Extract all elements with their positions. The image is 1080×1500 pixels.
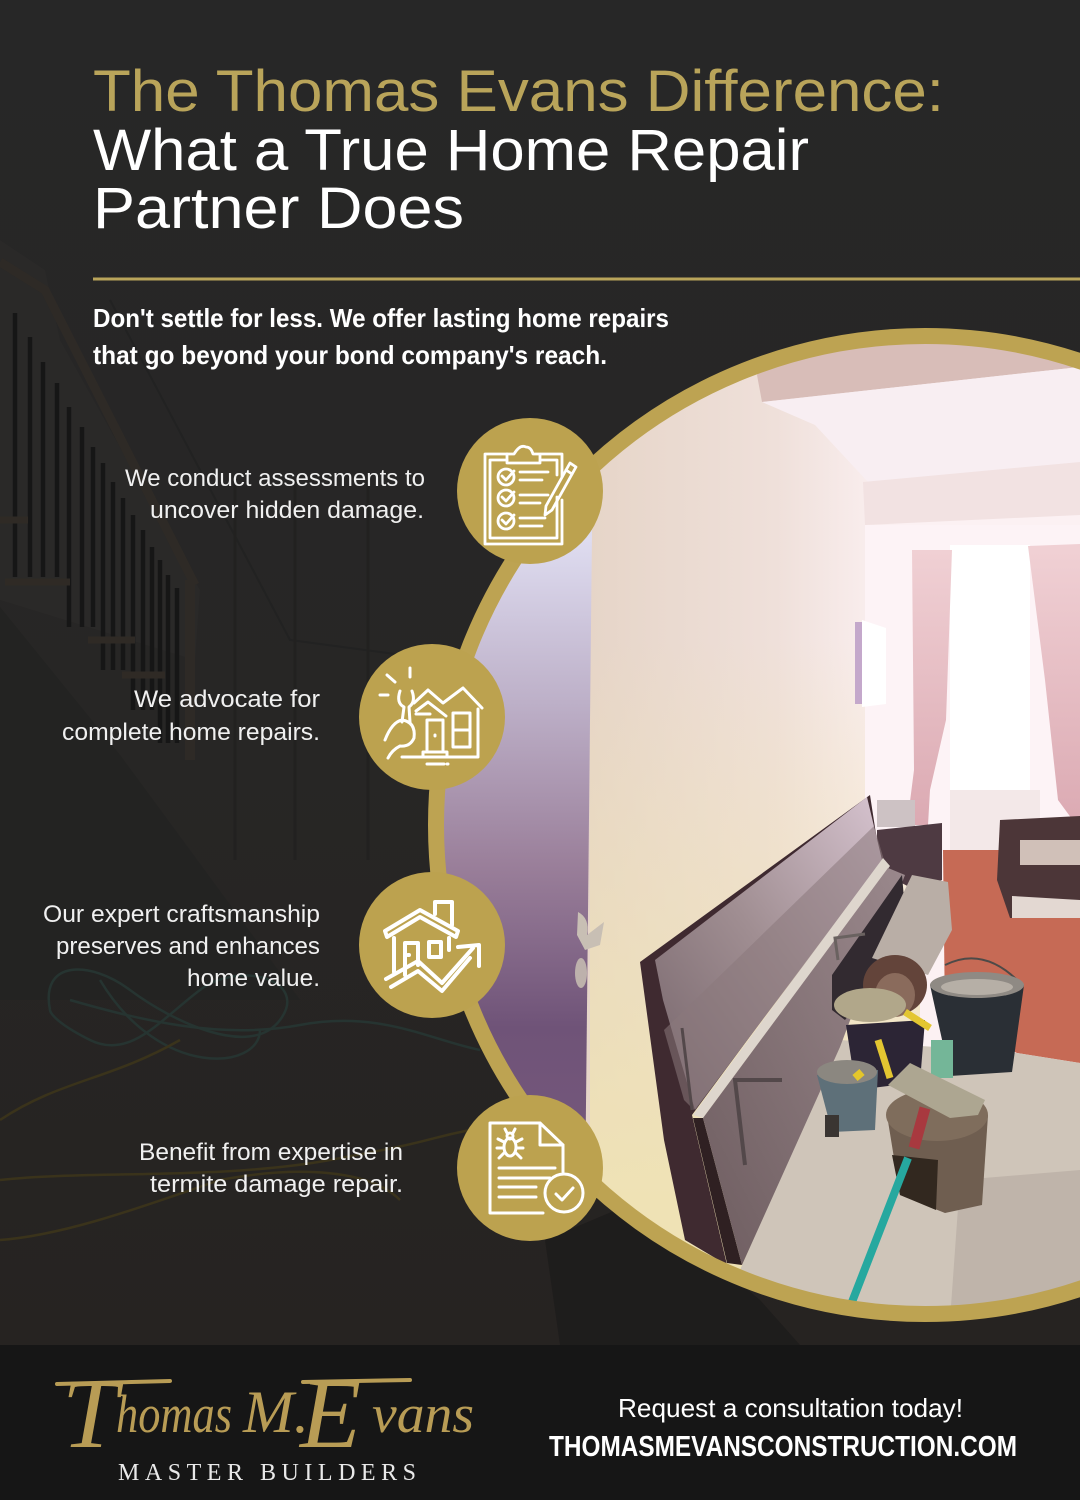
title: Partner Does	[93, 176, 464, 241]
far room wall and window	[865, 525, 920, 838]
furniture	[877, 800, 915, 827]
carpet and floor	[943, 850, 1080, 1063]
gold circular ring around photo	[436, 336, 1080, 1314]
item 3 text: Our expert craftsmanship	[43, 901, 320, 928]
icon: termite report document	[457, 1095, 603, 1241]
icon: wrench and house	[359, 644, 505, 790]
item 1 text: uncover hidden damage.	[150, 497, 424, 524]
ceiling	[757, 344, 1074, 402]
green cup	[931, 1040, 953, 1078]
call to action	[549, 1393, 1017, 1463]
door	[444, 530, 592, 1121]
leaning boards	[640, 795, 880, 1265]
subheading: that go beyond your bond company's reach.	[93, 340, 607, 370]
small bucket with bag	[817, 1060, 878, 1137]
logo: homas	[116, 1384, 232, 1444]
call to action: THOMASMEVANSCONSTRUCTION.COM	[549, 1431, 1017, 1463]
door handles	[577, 912, 604, 950]
item 3 text: preserves and enhances	[56, 933, 320, 960]
title: The Thomas Evans Difference:	[93, 59, 944, 124]
dark paint bucket with roller	[834, 988, 930, 1090]
footer band	[0, 1345, 1080, 1500]
rolled carpet	[872, 875, 952, 975]
item 4 text	[139, 1139, 403, 1198]
call to action: Request a consultation today!	[618, 1393, 963, 1423]
photo: room under renovation in circular frame	[430, 330, 1080, 1330]
icon: clipboard checklist	[457, 418, 603, 564]
item 4 text: Benefit from expertise in	[139, 1139, 403, 1166]
logo: M.	[242, 1379, 309, 1445]
logo: vans	[372, 1384, 474, 1444]
subheading	[93, 303, 669, 370]
black bucket	[930, 958, 1024, 1076]
item 3 text: home value.	[187, 965, 320, 992]
dark panel	[832, 875, 908, 1020]
paint tub with roller and pole	[852, 1063, 988, 1302]
item 2 text: complete home repairs.	[62, 719, 320, 746]
item 2 text	[62, 686, 320, 746]
item 1 text: We conduct assessments to	[125, 465, 425, 492]
title: What a True Home Repair	[93, 118, 809, 183]
title	[93, 59, 944, 241]
logo: E	[298, 1358, 361, 1469]
logo: T	[62, 1358, 124, 1469]
item 2 text: We advocate for	[134, 686, 320, 713]
subheading: Don't settle for less. We offer lasting home repairs	[93, 303, 669, 333]
item 3 text	[43, 901, 320, 992]
icon: house value rising arrow	[359, 872, 505, 1018]
logo: MASTER BUILDERS	[118, 1460, 416, 1486]
logo	[57, 1358, 474, 1486]
item 4 text: termite damage repair.	[150, 1171, 403, 1198]
item 1 text	[125, 465, 425, 524]
tv on wall	[855, 620, 886, 707]
